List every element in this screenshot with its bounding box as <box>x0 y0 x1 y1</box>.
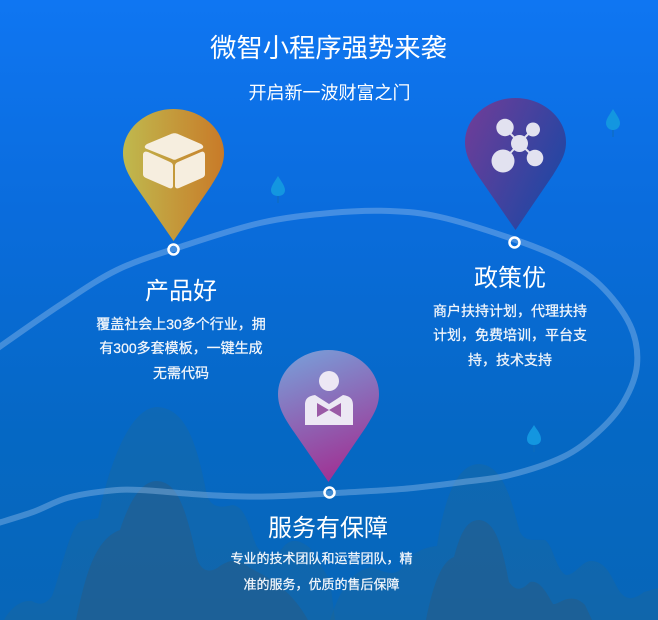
text: service description: 专业的技术团队和运营团队，精 <box>230 551 412 566</box>
text: service description <box>230 551 412 592</box>
heading: policy: 政策优 <box>474 265 546 292</box>
droplet left <box>271 176 285 203</box>
heading: product: 产品好 <box>145 278 217 305</box>
heading: service: 服务有保障 <box>268 515 388 542</box>
droplet lower right <box>527 425 541 452</box>
droplet right top <box>606 109 620 137</box>
mountains back layer <box>4 407 658 620</box>
title: 微智小程序强势来袭 <box>210 33 447 63</box>
icon: person with bow tie <box>305 371 353 425</box>
icon: box <box>143 133 205 188</box>
pin node: service <box>324 488 334 498</box>
text: product description: 覆盖社会上30多个行业，拥 <box>96 316 266 332</box>
mountains front layer <box>76 481 592 620</box>
text: policy description: 商户扶持计划，代理扶持 <box>433 302 587 318</box>
text: policy description <box>433 302 587 368</box>
text: product description: 无需代码 <box>153 364 209 380</box>
text: service description: 准的服务，优质的售后保障 <box>243 577 400 592</box>
pin node: product <box>168 244 178 254</box>
pin: policy <box>465 98 566 230</box>
text: policy description: 计划，免费培训，平台支 <box>433 327 587 343</box>
icon: network <box>492 119 543 172</box>
route line <box>0 211 637 524</box>
subtitle: 开启新一波财富之门 <box>248 83 410 103</box>
text: product description <box>96 316 266 380</box>
pin: product <box>123 109 224 241</box>
pin: service <box>278 350 379 482</box>
text: policy description: 持，技术支持 <box>468 352 552 368</box>
pin node: policy <box>510 238 520 248</box>
text: product description: 有300多套模板，一键生成 <box>99 340 263 356</box>
